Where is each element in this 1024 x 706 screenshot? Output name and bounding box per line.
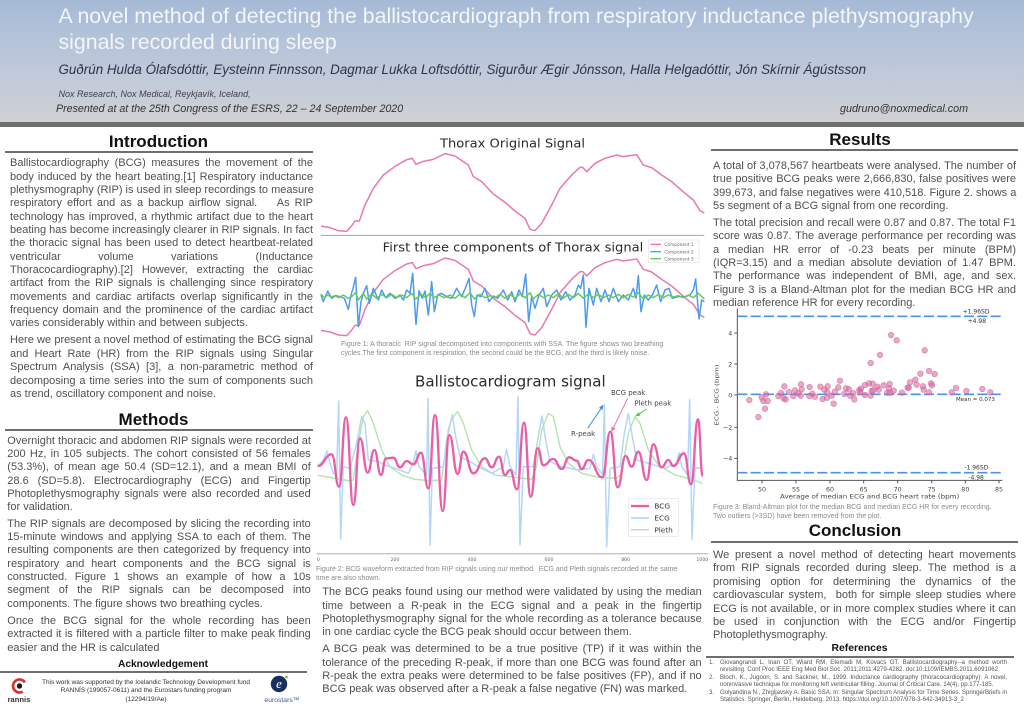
- caption: figure 1: [341, 340, 663, 356]
- y tick labels: 4: [728, 330, 732, 337]
- x axis: 600: [545, 557, 553, 563]
- text: conclusion paragraph: cardiovascular system, both for simple sleep studies where: [713, 589, 1016, 601]
- list: references: Golyandina N., Zhigljavsky A. Basic SSA. In: Singular Spectrum Analysis for Time Series. SpringerBriefs in: [720, 689, 1007, 696]
- x axis: 1000: [696, 557, 708, 563]
- text: results paragraph two: (IQR=3.15) and a median absolute deviation of 1.47 BPM.: [713, 257, 1016, 269]
- x axis: 800: [621, 557, 630, 563]
- x axis: 0: [317, 557, 320, 563]
- annotation: upper limit: +4.98: [968, 318, 986, 325]
- text: introduction paragraph two: as trend, oscillatory component and noise.: [10, 388, 216, 400]
- text: methods paragraph three: easier and the HR is calculated: [7, 642, 160, 654]
- text: introduction paragraph one: [10, 157, 314, 329]
- text: introduction paragraph one: Thoracocardiography).[2] However, extracting the cardiac: [10, 264, 313, 276]
- text: results paragraph two: The performance was independent of BMI, age, and sex.: [713, 270, 1016, 282]
- line: thorax original: [321, 154, 704, 231]
- y tick labels: −4: [723, 456, 732, 463]
- text: conclusion paragraph: We present a novel method of detecting heart movements: [713, 549, 1016, 561]
- text: methods paragraph one: Overnight thoracic and abdomen RIP signals were recorded at: [7, 435, 311, 447]
- chart: figure 2 ballistocardiogram: [316, 372, 708, 563]
- chart title: ballistocardiogram signal: Ballistocardiogram signal: [415, 372, 606, 390]
- text: validation paragraph two: BCG peak was observed after a R-peak a false negative (FN) was marked.: [322, 683, 687, 695]
- text: introduction paragraph two: Spectrum Analysis (SSA) [3], a non-parametric method of: [10, 360, 313, 372]
- text: conclusion paragraph: [713, 549, 1016, 641]
- text: validation paragraph two: A BCG peak was determined to be a true positive (TP) if it was within the: [322, 643, 702, 655]
- text: results paragraph two: score was 0.87. The average performance per recording was: [713, 230, 1016, 242]
- text: methods paragraph one: (53.3%), of mean age 50.4 (SD=12.1), and a mean BMI of: [7, 461, 311, 473]
- text: methods paragraph one: 200 Hz, in 105 subjects. The cohort consisted of 56 females: [7, 448, 311, 460]
- text: methods paragraph three: extracted it is filtered with a particle filter to make peak finding: [7, 628, 311, 640]
- caption: figure 3: [713, 504, 992, 520]
- x tick labels: 65: [860, 487, 868, 494]
- text: funding statement: RANNÍS (199057-0611) and the Eurostars funding program: [61, 687, 231, 694]
- text: validation paragraph one: time between a R-peak in the ECG signal and a peak in the fingertip: [322, 600, 702, 612]
- list: references: 2.: [709, 674, 714, 681]
- legend: signals: Pleth: [654, 525, 673, 534]
- annotation: r-peak: [571, 405, 604, 438]
- icon: eurostars logo: eurostars™: [264, 697, 300, 704]
- text: conclusion paragraph: ECG is not available, or in more complex studies where it can: [713, 603, 1016, 615]
- annotation: pleth peak: Pleth peak: [634, 400, 672, 408]
- text: results paragraph one: 399,673, and false negatives were 410,518. Figure 2. shows a: [713, 187, 1016, 199]
- scatter points: [746, 332, 993, 420]
- text: introduction paragraph one: the thoracic signal has been used to detect heartbeat-related: [10, 237, 313, 249]
- text: introduction paragraph two: Here we present a novel method of estimating the BCG signal: [10, 334, 313, 346]
- title: [58, 4, 974, 54]
- text: validation paragraph one: The BCG peaks found using our method were validated by using the median: [322, 586, 702, 598]
- x axis: [317, 554, 708, 563]
- title: A novel method of detecting the ballistocardiograph from respiratory inductance plethysmography: [58, 4, 974, 28]
- y tick labels: 0: [728, 392, 732, 399]
- annotation: pleth peak: [634, 400, 672, 416]
- text: introduction paragraph one: respiratory effort and as a backup airflow signal. As RIP: [10, 197, 313, 209]
- caption: figure 2: Figure 2: BCG waveform extracted from RIP signals using our method. ECG and Pleth signals recorded at the same: [316, 566, 677, 573]
- heading: conclusion: Conclusion: [809, 521, 901, 540]
- text: results paragraph one: 5s segment of a BCG signal from one recording.: [713, 200, 948, 212]
- list: references: Giovangrandi L, Inan OT, Wiard RM, Etemadi M, Kovacs GT. Ballistocardiography--a method worth: [720, 659, 1007, 666]
- authors: Guðrún Hulda Ólafsdóttir, Eysteinn Finnsson, Dagmar Lukka Loftsdóttir, Sigurður Ægir Jónsson, Halla Helgadóttir, Jón Skírnir Ágústsson: [58, 62, 866, 77]
- text: results paragraph two: a median HR error of -0.23 beats per minute (BPM): [713, 244, 1016, 256]
- text: methods paragraph two: [7, 518, 311, 610]
- text: introduction paragraph one: plethysmography (RIP) is used in sleep recordings to measure: [10, 184, 314, 196]
- text: validation paragraph two: [322, 643, 702, 695]
- y tick labels: 2: [728, 361, 732, 368]
- annotation: lower limit: -4.98: [968, 474, 984, 481]
- line: pleth: [318, 411, 703, 483]
- annotation: lower limit: -1.96SD: [964, 465, 989, 472]
- text: validation paragraph one: Photoplethysmography signal for the whole recording as a tolerance because: [322, 613, 702, 625]
- chart title: first three components: First three components of Thorax signal: [383, 240, 643, 255]
- heading: introduction: Introduction: [109, 132, 208, 151]
- text: methods paragraph two: respiratory and heart components and the BCG signal is: [7, 558, 311, 570]
- text: introduction paragraph one: frequency domain and the prominence of the cardiac artifact: [10, 304, 313, 316]
- text: methods paragraph one: 28.6 (SD=5.8). Electrocardiography (ECG) and Fingertip: [7, 475, 311, 487]
- annotation: upper limit: +1.96SD: [963, 309, 990, 316]
- legend: components: Component 1: [664, 242, 694, 248]
- text: introduction paragraph two: and Heart Rate (HR) from the RIP signals using Singular: [10, 348, 313, 360]
- text: validation paragraph two: tolerance of the preceding R-peak, if more than one BCG was found after an: [322, 657, 702, 669]
- text: introduction paragraph one: Ballistocardiography (BCG) measures the movement of the: [10, 157, 313, 169]
- annotation: bcg peak: [611, 389, 646, 432]
- contact email: gudruno@noxmedical.com: [840, 103, 968, 115]
- line: bcg: [318, 415, 703, 511]
- legend: signals: ECG: [654, 514, 670, 523]
- text: conclusion paragraph: promising option for determining the dynamics of the: [713, 576, 1016, 588]
- axes: [734, 308, 1002, 483]
- caption: figure 1: Figure 1: A thoracic RIP signal decomposed into components with SSA. The figure shows two breathing: [341, 340, 663, 348]
- annotation: upper limit: [963, 309, 990, 325]
- caption: figure 2: [316, 566, 677, 582]
- list: references: Statistics. Springer, Berlin, Heidelberg. 2013. https://doi.org/10.1007/978-3-642-34913-3_2: [720, 696, 964, 703]
- caption: figure 3: Figure 3: Bland-Altman plot for the median BCG and median ECG HR for every recording.: [713, 504, 992, 511]
- text: introduction paragraph one: ventricular volume variations (Inductance: [10, 251, 313, 263]
- text: methods paragraph one: Photoplethysmography signals were also recorded and used: [7, 488, 311, 500]
- line: component 2: [321, 273, 704, 327]
- heading: acknowledgement: Acknowledgement: [118, 659, 208, 670]
- panel: acknowledgement: [0, 659, 307, 704]
- text: results paragraph one: [713, 160, 1016, 212]
- text: introduction paragraph one: artifact from the RIP signals is challenging since respiratory: [10, 277, 313, 289]
- x tick labels: 80: [961, 487, 969, 494]
- text: conclusion paragraph: from RIP signals recorded during sleep. The method is a: [713, 562, 1016, 574]
- reference lines: [737, 316, 1002, 473]
- text: validation paragraph one: [322, 586, 702, 638]
- chart title: thorax original signal: Thorax Original Signal: [439, 135, 585, 150]
- caption: figure 3: Two outliers (>3SD) have been removed from the plot.: [713, 513, 881, 520]
- text: results paragraph one: true positive BCG peaks were 2,666,830, false positives were: [713, 173, 1016, 185]
- title: signals recorded during sleep: [58, 30, 337, 54]
- x tick labels: 60: [826, 487, 834, 494]
- text: funding statement: (12294/19/Ae): [125, 696, 167, 703]
- text: results paragraph two: Figure 3 is a Bland-Altman plot for the median BCG HR and: [713, 284, 1016, 296]
- text: methods paragraph two: The RIP signals are decomposed by slicing the recording into: [7, 518, 311, 530]
- y tick labels: [723, 330, 732, 463]
- text: results paragraph one: A total of 3,078,567 heartbeats were analysed. The number of: [713, 160, 1016, 172]
- text: methods paragraph two: components. The figure shows two breathing cycles.: [7, 598, 263, 610]
- list: references: [709, 659, 1007, 703]
- legend: signals: [628, 498, 678, 537]
- legend: components: [648, 240, 699, 262]
- legend: components: Component 2: [664, 249, 694, 255]
- chart: figure 1 thorax signals: [320, 135, 705, 336]
- annotation: mean: Mean = 0.073: [956, 397, 995, 403]
- icon: rannis logo: [8, 678, 30, 704]
- x tick labels: 70: [894, 487, 902, 494]
- y axis label: ECG - BCG (bpm): [715, 364, 721, 426]
- x tick labels: 85: [995, 487, 1003, 494]
- line: ecg: [318, 397, 702, 547]
- text: funding statement: [42, 679, 250, 703]
- heading: methods: Methods: [119, 410, 188, 429]
- panel: methods: [5, 410, 313, 654]
- annotation: r-peak: R-peak: [571, 430, 596, 438]
- conference note: Presented at at the 25th Congress of the ESRS, 22 – 24 September 2020: [56, 103, 403, 115]
- header bottom bar: [0, 122, 1024, 127]
- x tick labels: 75: [928, 487, 936, 494]
- y tick labels: −2: [723, 425, 732, 432]
- panel: conclusion: [711, 521, 1018, 641]
- line: component 1: [321, 258, 704, 336]
- text: introduction paragraph one: body induced by the heart beating.[1] Respiratory inductance: [10, 171, 313, 183]
- x tick labels: 50: [758, 487, 766, 494]
- list: references: revisiting. Conf Proc IEEE Eng Med Biol Soc. 2011;2011:4279-4282. doi:10.1109/IEMBS.2011.6091062: [720, 666, 998, 673]
- text: methods paragraph one: for validation.: [7, 501, 73, 513]
- panel: references: [706, 643, 1014, 703]
- x tick labels: 55: [792, 487, 800, 494]
- text: validation paragraph one: in one cardiac cycle the BCG peak should occur between them.: [322, 626, 632, 638]
- text: results paragraph two: The total precision and recall were 0.87 and 0.87. The total F1: [713, 217, 1016, 229]
- text: methods paragraph two: resulting components are then categorized by frequency into: [7, 544, 311, 556]
- text: methods paragraph three: Once the BCG signal for the whole recording has been: [7, 614, 311, 626]
- heading: references: References: [831, 643, 888, 654]
- text: methods paragraph two: segment of the RIP signals can be decomposed into: [7, 584, 311, 596]
- text: introduction paragraph one: movements and cardiac artifacts overlap significantly in the: [10, 291, 313, 303]
- x axis: 400: [468, 557, 476, 563]
- text: results paragraph two: median reference HR for every recording.: [713, 297, 915, 309]
- affiliation: Nox Research, Nox Medical, Reykjavík, Iceland,: [58, 88, 251, 98]
- text: introduction paragraph one: varies considerably within and between subjects.: [10, 317, 248, 329]
- text: introduction paragraph one: technology has improved, a rhythmic artifact due to the heart: [10, 211, 313, 223]
- list: references: noninvasive technique for monitoring left ventricular filling. Journal of Critical Care, 14(4), pp.177-185.: [720, 681, 993, 688]
- panel: introduction: [5, 132, 314, 400]
- text: validation paragraph two: R-peak the extra peaks were determined to be false positives (FP), and if no: [322, 670, 702, 682]
- legend: signals: BCG: [654, 502, 670, 511]
- icon: eurostars logo: [264, 676, 300, 704]
- text: methods paragraph three: [7, 614, 311, 654]
- annotation: lower limit: [964, 465, 989, 481]
- x axis label: Average of median ECG and BCG heart rate (bpm): [780, 494, 959, 501]
- text: conclusion paragraph: be used in conjunction with the ECG and/or Fingertip: [713, 616, 1016, 628]
- text: methods paragraph two: constructed. Figure 1 shows an example of how a 10s: [7, 571, 311, 583]
- legend: components: Component 3: [664, 256, 694, 262]
- x axis: 200: [391, 557, 399, 563]
- icon: rannis logo: rannis: [8, 695, 30, 704]
- list: references: 1.: [709, 659, 714, 666]
- list: references: Bloch, K., Jugoon, S. and Sackner, M., 1999. Inductance cardiography (thoracocardiography): A novel,: [720, 674, 1007, 681]
- line: component 3: [321, 293, 704, 300]
- text: funding statement: This work was supported by the Icelandic Technology Development fund: [42, 679, 250, 686]
- icon: eurostars logo: e: [276, 676, 282, 691]
- text: results paragraph two: [713, 217, 1016, 309]
- header banner: [0, 0, 1024, 127]
- text: conclusion paragraph: Photoplethysmography.: [713, 629, 828, 641]
- x tick labels: [758, 487, 1003, 494]
- text: methods paragraph two: 15-minute windows and applying SSA to each of them. The: [7, 531, 311, 543]
- caption: figure 1: cycles.The first component is respiration, the second could be the BCG, and the third is likely noise.: [341, 350, 649, 356]
- panel: results: [381, 130, 1018, 512]
- text: introduction paragraph two: [10, 334, 313, 400]
- text: methods paragraph one: [7, 435, 311, 513]
- annotation: bcg peak: BCG peak: [611, 389, 646, 397]
- list: references: 3.: [709, 689, 714, 696]
- text: introduction paragraph one: beating has become increasingly clearer in RIP signals. In fact: [10, 224, 313, 236]
- caption: figure 2: time are also shown.: [316, 575, 380, 582]
- chart: figure 3 bland-altman plot: [714, 308, 1003, 501]
- text: introduction paragraph two: decomposing a time series into the sum of components such: [10, 374, 313, 386]
- heading: results: Results: [829, 130, 891, 149]
